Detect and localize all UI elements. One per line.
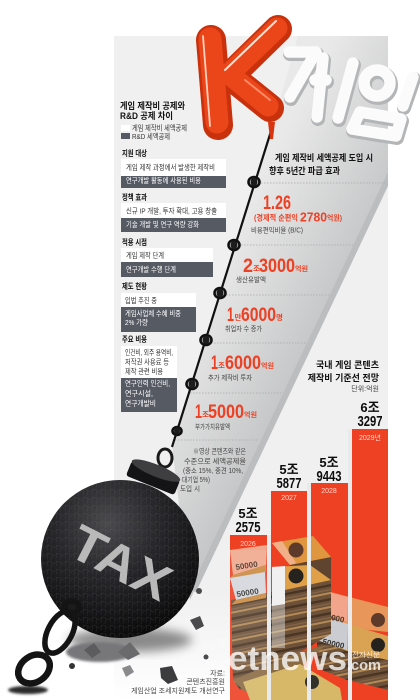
bar 2029: 3297 [358,413,382,430]
source: 자료: [210,668,225,678]
stat: production: 생산유발액 [236,275,266,284]
wrecking ball with TAX [41,449,199,638]
panel: system status: 게임사업체 수혜 비중 [125,309,181,318]
money stacks [230,429,388,700]
source [131,668,226,695]
stat: benefit-cost ratio: (경제적 순편익 [254,212,298,222]
stat: benefit-cost ratio [251,193,342,234]
panel: support target [121,148,226,188]
main stack [230,536,331,692]
bar 2027: 5조 [279,462,299,477]
panel: main costs: 제작 관련 비용 [125,367,163,376]
panel: system status: 입법 추진 중 [125,296,157,305]
chain with knots [172,128,272,447]
stat: value added: 1 [195,402,202,423]
panel: application timing: 연구개발 수행 단계 [126,265,176,274]
footnote: 도입 시 [180,485,200,493]
bar 2027: 2027 [281,495,297,502]
panel: policy effect: 신규 IP 개발, 투자 확대, 고용 창출 [126,206,217,216]
bar 2026: 2575 [236,519,260,536]
panel: policy effect: 기술 개발 및 연구 역량 강화 [126,220,199,229]
stat: value added: 5000 [208,402,244,423]
panel: main costs: 연구개발비 [125,399,156,408]
heading: ripple effect: 게임 제작비 세액공제 도입 시 [275,152,373,163]
stat: value added: 억원 [244,410,257,419]
bar 2028: 2028 [321,488,337,495]
heading: ripple effect: 향후 5년간 파급 효과 [269,165,341,176]
stat: employment: 만 [234,312,242,322]
stat: additional investment: 추가 제작비 투자 [208,373,252,382]
etnews watermark: .com [347,657,381,674]
main stack: 50000 [236,587,260,599]
stat: employment: 1 [227,305,234,326]
chart title: 국내 게임 콘텐츠 [316,359,379,370]
panel: support target: 게임 제작 과정에서 발생한 제작비 [126,163,215,172]
panel: application timing: 게임 제작 단계 [126,251,164,260]
source: 게임산업 조세지원제도 개선연구 [131,686,226,695]
stat: benefit-cost ratio: 비용편익비율 (B/C) [251,226,303,234]
bar 2029: 2029년 [359,433,381,442]
right stack: 50000 [322,611,346,625]
panel: system status: 제도 현황 [122,281,147,291]
bar 2026: 2026 [240,541,256,548]
rubble debris [8,588,208,694]
chain on ground [13,601,81,689]
ball ring [158,449,172,467]
chart title [308,359,380,393]
etnews watermark [202,638,381,678]
legend [121,124,187,141]
heading: credit comparison [120,100,186,121]
heading: credit comparison: 게임 제작비 공제와 [120,100,186,111]
chart title: 제작비 기준선 전망 [308,372,380,383]
logo text: etnews [228,640,347,678]
footnote: 대기업 5%) [182,475,210,484]
right stack: 50000 [322,637,346,651]
stat: benefit-cost ratio: 억원) [327,212,342,222]
panel: main costs [121,334,177,412]
legend: 게임 제작비 세액공제 [132,124,187,132]
right stack [317,592,388,690]
bar 2029 [352,400,388,700]
bar 2029: 6조 [360,400,380,415]
stat: production: 조 [253,264,260,273]
stat: production [236,256,308,284]
ball cap [126,455,182,495]
panel: main costs: 주요 비용 [122,334,147,344]
bar 2026: 5조 [238,506,258,521]
panel: support target: 지원 대상 [122,148,147,158]
stat: additional investment: 억원 [261,361,274,370]
stat: employment: 취업자 수 증가 [225,324,262,333]
panel: system status [121,281,196,332]
bar 2027: 5877 [276,475,302,492]
K letter balloon [203,21,278,139]
bar 2028 [311,455,348,700]
stat: employment: 명 [276,312,283,322]
panel: system status: 2% 가량 [125,318,148,327]
loose notes [243,664,342,700]
footnote: 수준으로 세액공제율 [184,456,247,466]
panel: main costs: 인건비, 외주 용역비, [125,348,173,357]
ground shadow [68,628,192,652]
footnote: (중소 15%, 중견 10%, [183,466,243,475]
stat: additional investment: 6000 [225,353,261,374]
bar 2028: 9443 [316,468,342,485]
Korean title 게임 [289,52,414,138]
heading: ripple effect [269,152,373,176]
stat: additional investment: 1 [211,353,218,374]
stat: production: 3000 [259,256,295,277]
stat: additional investment: 조 [218,361,225,370]
legend: R&D 세액공제 [132,132,170,141]
background panel [114,36,388,700]
panel: main costs: 연구인력 인건비, [125,379,170,388]
stat: production: 억원 [295,264,308,273]
stat: production: 2 [243,256,253,277]
footnote: ※영상 콘텐츠와 같은 [193,446,246,456]
stat: value added: 부가가치유발액 [195,422,230,431]
stat: value added [195,402,257,431]
etnews watermark: 전자신문 [352,650,381,659]
ball body [41,480,199,638]
stat: employment: 6000 [241,305,276,326]
stat: value added: 조 [202,410,209,419]
source: 콘텐츠진흥원 [186,677,225,686]
logo icon [202,638,227,659]
panel: policy effect [121,192,226,232]
main stack: 50000 [235,560,259,572]
panel: main costs: 저작권 사용료 등 [125,358,169,366]
chart title: 단위:억원 [351,384,379,393]
panel: support target: 연구개발 활동에 사용된 비용 [126,176,201,185]
footnote [180,446,247,493]
heading: credit comparison: R&D 공제 차이 [120,110,173,121]
bar 2028: 5조 [319,455,339,470]
stat: additional investment [208,353,274,382]
bar 2026 [230,506,267,700]
stat: employment [225,305,283,333]
stat: benefit-cost ratio: 1.26 [263,193,291,214]
panel: application timing [121,237,213,277]
panel: main costs: 연구시설, [125,389,153,398]
TAX lettering: TAX [61,514,181,612]
panel: application timing: 적용 시점 [122,237,147,247]
panel: policy effect: 정책 효과 [122,192,147,202]
bar 2027 [271,462,307,700]
bar chart [230,400,388,700]
stat: benefit-cost ratio: 2780 [300,210,327,224]
